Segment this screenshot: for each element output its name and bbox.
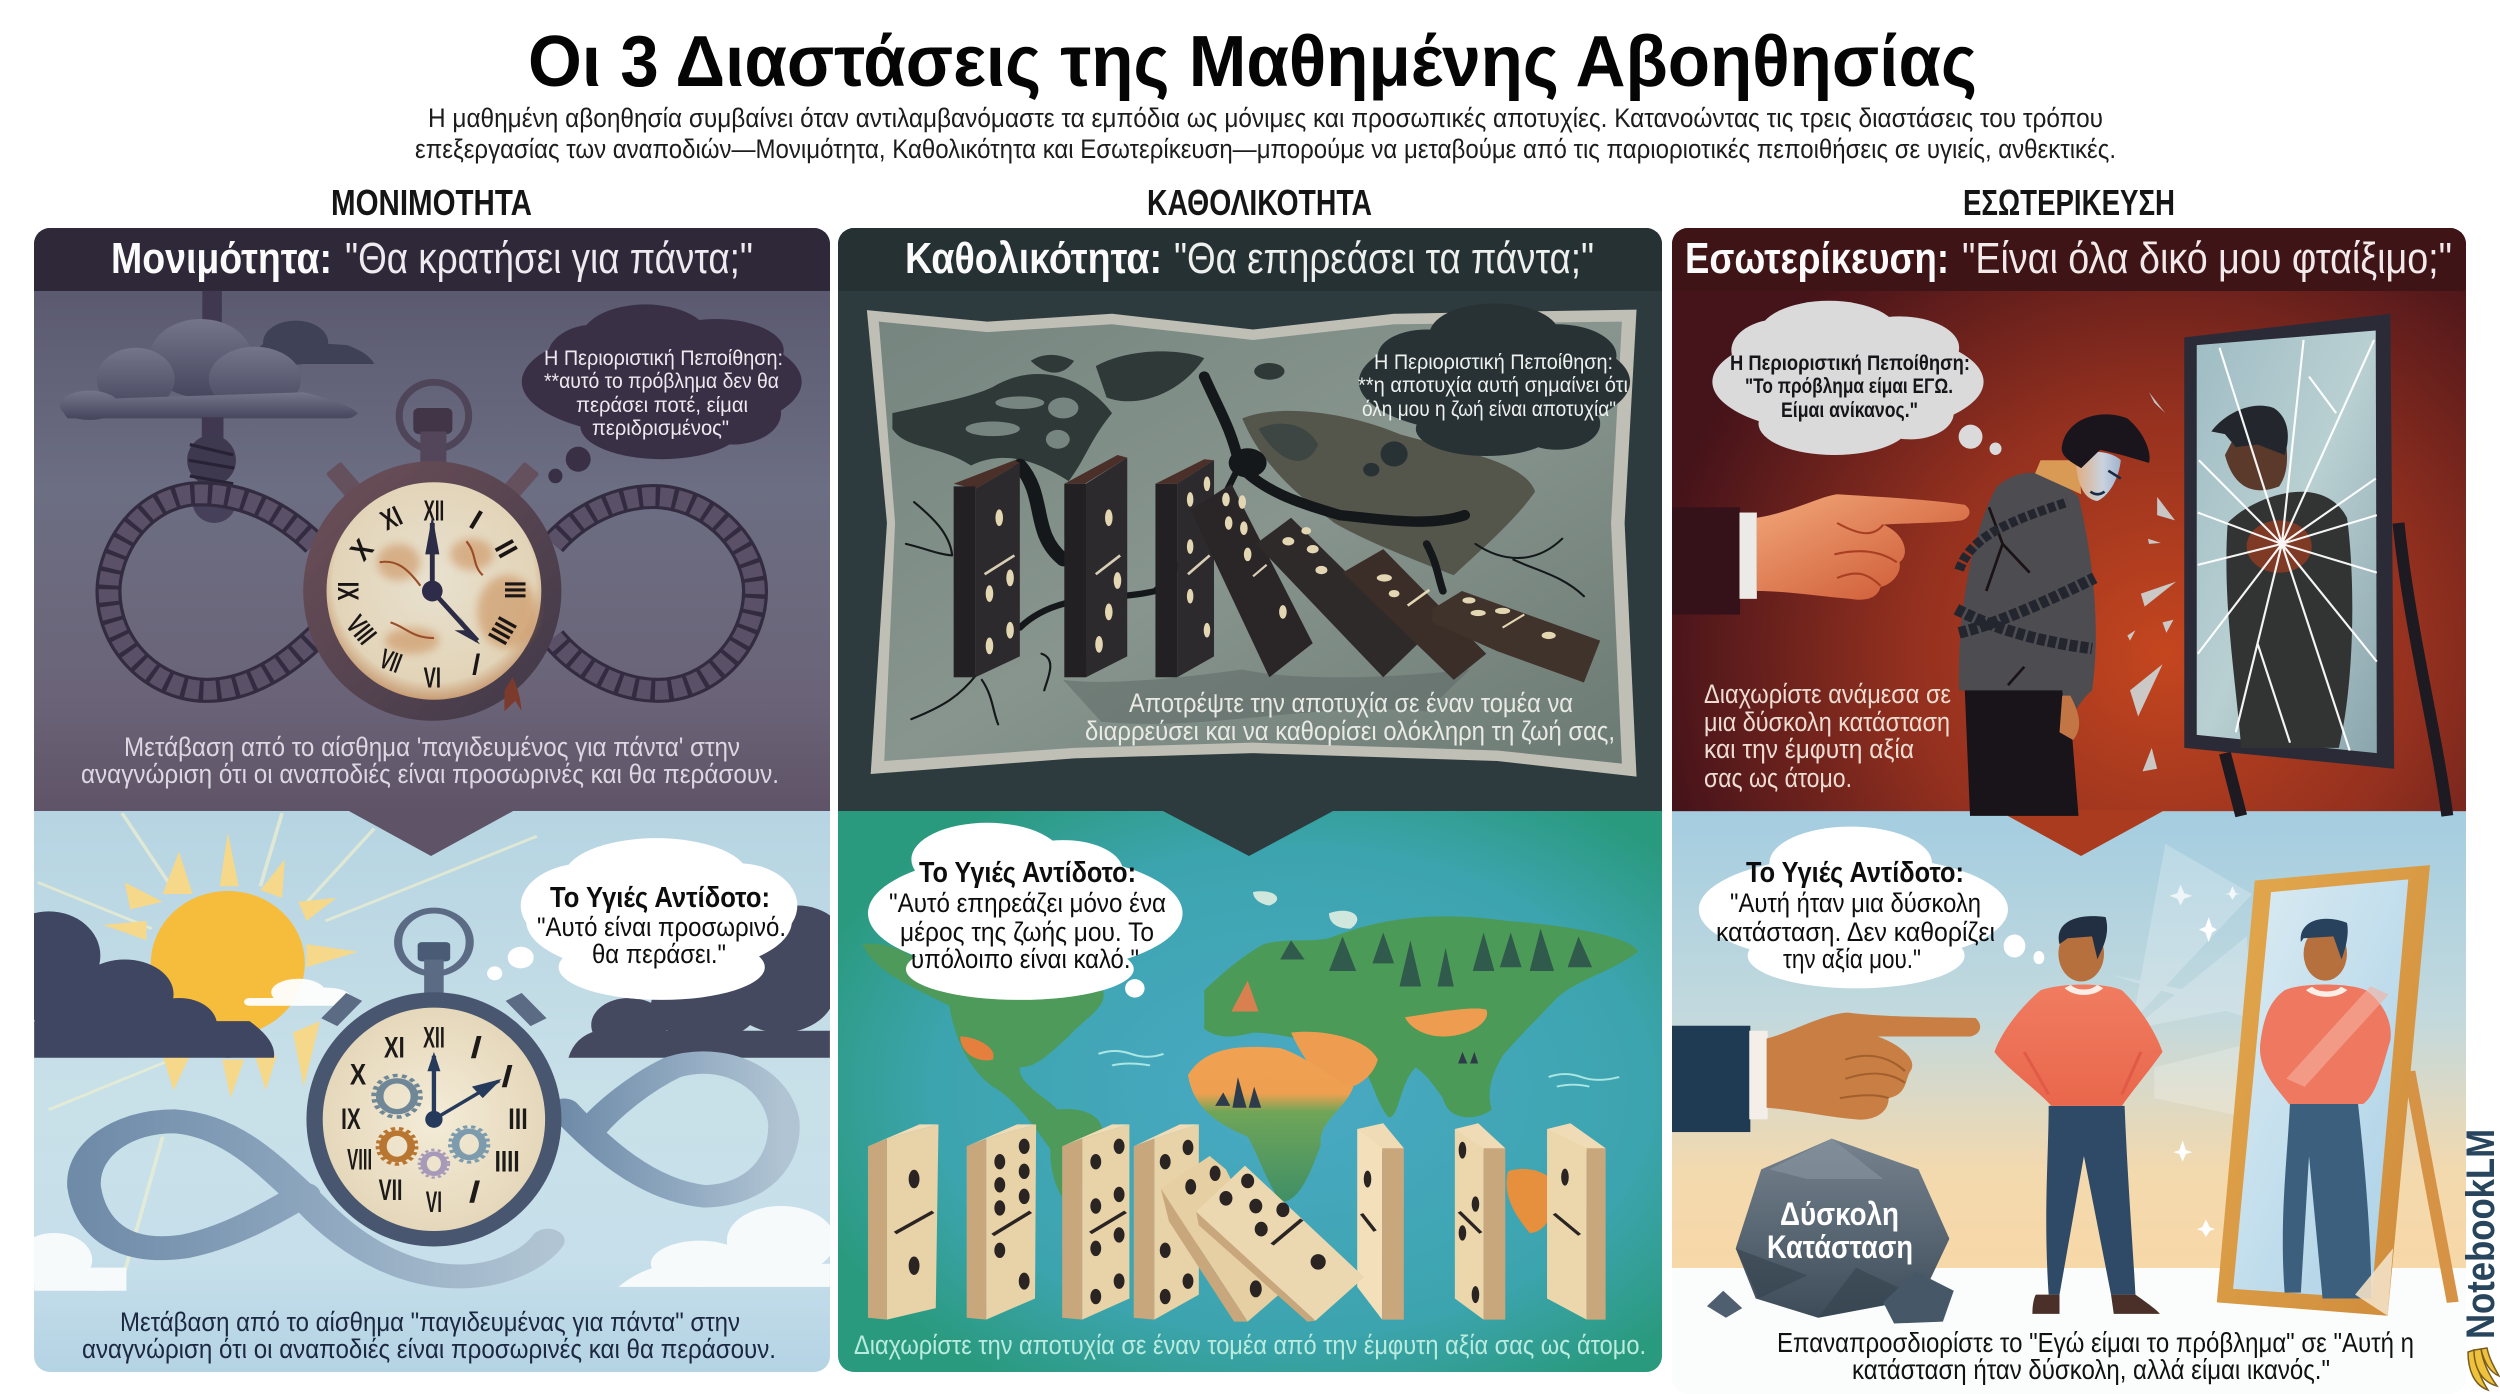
dark cloud back	[252, 321, 374, 365]
separate text	[1704, 679, 1951, 793]
separate text: Διαχωρίστε ανάμεσα σε	[1704, 679, 1951, 709]
antidote text	[537, 882, 786, 969]
domino 3	[1062, 1124, 1129, 1320]
panel header: "Θα κρατήσει για πάντα;"	[345, 234, 753, 283]
domino falling back	[1161, 1156, 1286, 1322]
reframe text: κατάσταση ήταν δύσκολη, αλλά είμαι ικανός."	[1852, 1354, 2330, 1385]
antidote text: κατάσταση. Δεν καθορίζει	[1716, 917, 1995, 947]
limiting belief text: Η Περιοριστική Πεποίθηση:	[544, 347, 783, 370]
limiting belief text	[1358, 351, 1628, 421]
old pocket watch: XI	[376, 501, 407, 537]
panel header	[1672, 228, 2466, 291]
panel header: Εσωτερίκευση:	[1685, 234, 1949, 283]
infinity ribbon	[84, 1063, 784, 1276]
old pocket watch: X	[344, 534, 380, 567]
domino falling 2	[1256, 518, 1419, 677]
antidote text: υπόλοιπο είναι καλό."	[911, 944, 1139, 974]
shift text	[81, 732, 779, 789]
domino standing 2	[1064, 455, 1127, 677]
spread text: διαρρεύσει και να καθορίσει ολόκληρη τη ζωή σας,	[1085, 716, 1615, 746]
storm cloud left	[34, 911, 274, 1058]
storm cloud	[60, 319, 358, 420]
old pocket watch: III	[498, 581, 530, 599]
old pocket watch: /	[472, 650, 480, 682]
antidote text: "Αυτό επηρεάζει μόνο ένα	[889, 888, 1166, 918]
light rays	[2111, 844, 2252, 1117]
arrow chevron	[347, 810, 515, 856]
stopwatch: /	[469, 1176, 480, 1209]
domino standing 3	[1155, 459, 1214, 677]
mirror	[2217, 865, 2453, 1316]
thought bubble dark	[522, 304, 802, 483]
rock	[1707, 1139, 1954, 1324]
old pocket watch: VI	[424, 663, 441, 695]
gears	[374, 1075, 488, 1178]
panel: permanence column	[0, 228, 846, 1372]
old pocket watch: XII	[424, 496, 444, 527]
rope infinity	[108, 494, 755, 690]
noose knot	[187, 435, 236, 523]
title: Οι 3 Διαστάσεις της Μαθημένης Αβοηθησίας	[528, 22, 1977, 102]
antidote text: μέρος της ζωής μου. Το	[900, 917, 1154, 947]
limiting belief text: Η Περιοριστική Πεποίθηση:	[1374, 351, 1613, 374]
shift text: Μετάβαση από το αίσθημα 'παγιδευμένος για πάντα' στην	[124, 732, 740, 762]
panel: universality column	[838, 228, 1662, 1372]
stopwatch	[306, 911, 561, 1246]
limiting belief text: όλη μου η ζωή είναι αποτυχία"	[1362, 398, 1616, 421]
white ground clouds	[16, 1206, 835, 1291]
storm cloud right	[568, 906, 846, 1058]
dominoes standing	[868, 1123, 1606, 1322]
antidote text: Το Υγιές Αντίδοτο:	[1746, 857, 1964, 889]
domino 4	[1134, 1124, 1199, 1320]
old pocket watch: I	[464, 505, 487, 536]
column heading: universality: ΚΑΘΟΛΙΚΟΤΗΤΑ	[1147, 182, 1372, 223]
icon: banana	[2468, 1348, 2499, 1390]
shift text: αναγνώριση ότι οι αναποδιές είναι προσωρινές και θα περάσουν.	[81, 759, 779, 789]
world map healthy	[863, 891, 1638, 1233]
rock label	[1767, 1196, 1913, 1265]
reframe text: Μετάβαση από το αίσθημα "παγιδευμένας για πάντα" στην	[120, 1307, 740, 1337]
reframe text: Διαχωρίστε την αποτυχία σε έναν τομέα από την έμφυτη αξία σας ως άτομο.	[854, 1330, 1646, 1360]
column heading: permanence: ΜΟΝΙΜΟΤΗΤΑ	[331, 182, 532, 223]
domino 2	[967, 1124, 1036, 1320]
panel: permanence limiting belief	[34, 228, 830, 856]
stopwatch: IX	[341, 1103, 361, 1136]
stopwatch: X	[350, 1058, 366, 1091]
panel header	[34, 228, 830, 291]
arrow chevron	[1997, 810, 2165, 856]
column heading: internalization: ΕΣΩΤΕΡΙΚΕΥΣΗ	[1963, 182, 2175, 223]
sparkles	[2170, 884, 2240, 1237]
panel: internalization column	[1672, 228, 2466, 1394]
antidote text: "Αυτό είναι προσωρινό.	[537, 912, 786, 942]
intro text: επεξεργασίας των αναποδιών—Μονιμότητα, Καθολικότητα και Εσωτερίκευση—μπορούμε να μεταβούμε από τις παριοριοτικές πεποιθήσεις σε υγιείς, ανθεκτικές.	[415, 134, 2116, 164]
domino 5	[1357, 1123, 1404, 1320]
stopwatch: VIII	[347, 1143, 372, 1176]
antidote text: θα περάσει."	[592, 939, 726, 969]
stopwatch: IIII	[495, 1145, 520, 1178]
stopwatch: /	[501, 1060, 513, 1093]
antidote text: Το Υγιές Αντίδοτο:	[550, 882, 770, 914]
antidote text	[889, 857, 1166, 974]
limiting belief text: περάσει ποτέ, είμαι	[576, 394, 748, 417]
limiting belief text: Είμαι ανίκανος."	[1781, 399, 1918, 422]
domino falling 4	[1432, 591, 1600, 683]
panel header: Μονιμότητα:	[111, 234, 332, 283]
panel header: Καθολικότητα:	[905, 234, 1162, 283]
panel header	[838, 228, 1662, 291]
stopwatch: XII	[423, 1021, 445, 1054]
limiting belief text: "Το πρόβλημα είμαι ΕΓΩ.	[1745, 375, 1953, 398]
chained man	[1956, 414, 2150, 816]
sun	[38, 813, 537, 1272]
chains	[1956, 502, 2095, 649]
rock label: Δύσκολη	[1780, 1196, 1899, 1232]
stopwatch: VII	[379, 1174, 402, 1207]
pointing hand	[1672, 1013, 1980, 1132]
panel: universality limiting belief	[838, 228, 1662, 856]
thought bubble	[487, 838, 797, 1000]
limiting belief text: περιδρισμένος"	[592, 417, 729, 440]
panel header: "Θα επηρεάσει τα πάντα;"	[1174, 234, 1594, 283]
thought bubble dark	[1359, 303, 1630, 476]
stopwatch: VI	[426, 1186, 442, 1218]
stopwatch: III	[508, 1103, 528, 1136]
reframe text: Επαναπροσδιορίστε το "Εγώ είμαι το πρόβλημα" σε "Αυτή η	[1777, 1327, 2414, 1358]
limiting belief text	[544, 347, 783, 440]
stopwatch: XI	[384, 1032, 405, 1064]
stopwatch: /	[470, 1032, 482, 1064]
antidote text: Το Υγιές Αντίδοτο:	[919, 857, 1136, 889]
domino falling 1	[1191, 484, 1313, 677]
old pocket watch: VIII	[339, 610, 382, 651]
spread text	[1085, 688, 1615, 746]
domino 1	[868, 1124, 938, 1320]
panel: permanence antidote	[0, 811, 846, 1372]
domino falling front	[1196, 1166, 1364, 1322]
limiting belief text	[1730, 352, 1970, 422]
rope hanging	[202, 290, 222, 322]
intro text: Η μαθημένη αβοηθησία συμβαίνει όταν αντιλαμβανόμαστε τα εμπόδια ως μόνιμες και προσωπικές αποτυχίες. Κατανοώντας τις τρεις διαστάσεις του τρόπου	[428, 103, 2103, 133]
mirror cracked	[2184, 314, 2447, 816]
separate text: σας ως άτομο.	[1704, 763, 1852, 793]
limiting belief text: **αυτό το πρόβλημα δεν θα	[544, 370, 779, 393]
antidote text	[1716, 857, 1995, 974]
person	[1994, 916, 2163, 1314]
reflection	[2211, 406, 2352, 748]
antidote text: την αξία μου."	[1783, 944, 1921, 974]
limiting belief text: **η αποτυχία αυτή σημαίνει ότι	[1358, 374, 1628, 397]
thought bubble	[868, 823, 1183, 1000]
reframe text: αναγνώριση ότι οι αναποδιές είναι προσωρινές και θα περάσουν.	[82, 1334, 776, 1364]
old pocket watch: VII	[375, 643, 406, 680]
glass shards	[2127, 392, 2176, 771]
reframe text	[82, 1307, 776, 1364]
arrow chevron	[1161, 810, 1335, 856]
panel: universality antidote	[838, 811, 1662, 1372]
reflection	[2260, 919, 2391, 1298]
small white cloud	[244, 979, 350, 1006]
cracked map	[867, 310, 1637, 777]
limiting belief text: Η Περιοριστική Πεποίθηση:	[1730, 352, 1970, 375]
domino falling 3	[1343, 549, 1486, 680]
rock label: Κατάσταση	[1767, 1229, 1913, 1265]
thought bubble	[1699, 827, 2044, 988]
old pocket watch: II	[488, 535, 523, 563]
separate text: και την έμφυτη αξία	[1704, 734, 1914, 764]
old pocket watch: IX	[331, 582, 363, 600]
domino standing 1	[954, 460, 1020, 677]
pointing hand	[1672, 494, 1970, 615]
dominoes falling dark	[954, 455, 1600, 683]
domino 6	[1455, 1123, 1505, 1320]
reframe text	[1777, 1327, 2414, 1385]
old pocket watch: IIII	[481, 611, 522, 649]
panel: internalization limiting belief	[1672, 228, 2466, 856]
old pocket watch	[303, 382, 561, 721]
thought bubble	[1712, 301, 2001, 455]
intro text	[415, 103, 2116, 164]
domino 7	[1547, 1123, 1606, 1320]
antidote text: "Αυτή ήταν μια δύσκολη	[1730, 888, 1981, 918]
spread text: Αποτρέψτε την αποτυχία σε έναν τομέα να	[1129, 688, 1573, 718]
separate text: μια δύσκολη κατάσταση	[1704, 707, 1950, 737]
panel: internalization antidote	[1672, 811, 2466, 1394]
